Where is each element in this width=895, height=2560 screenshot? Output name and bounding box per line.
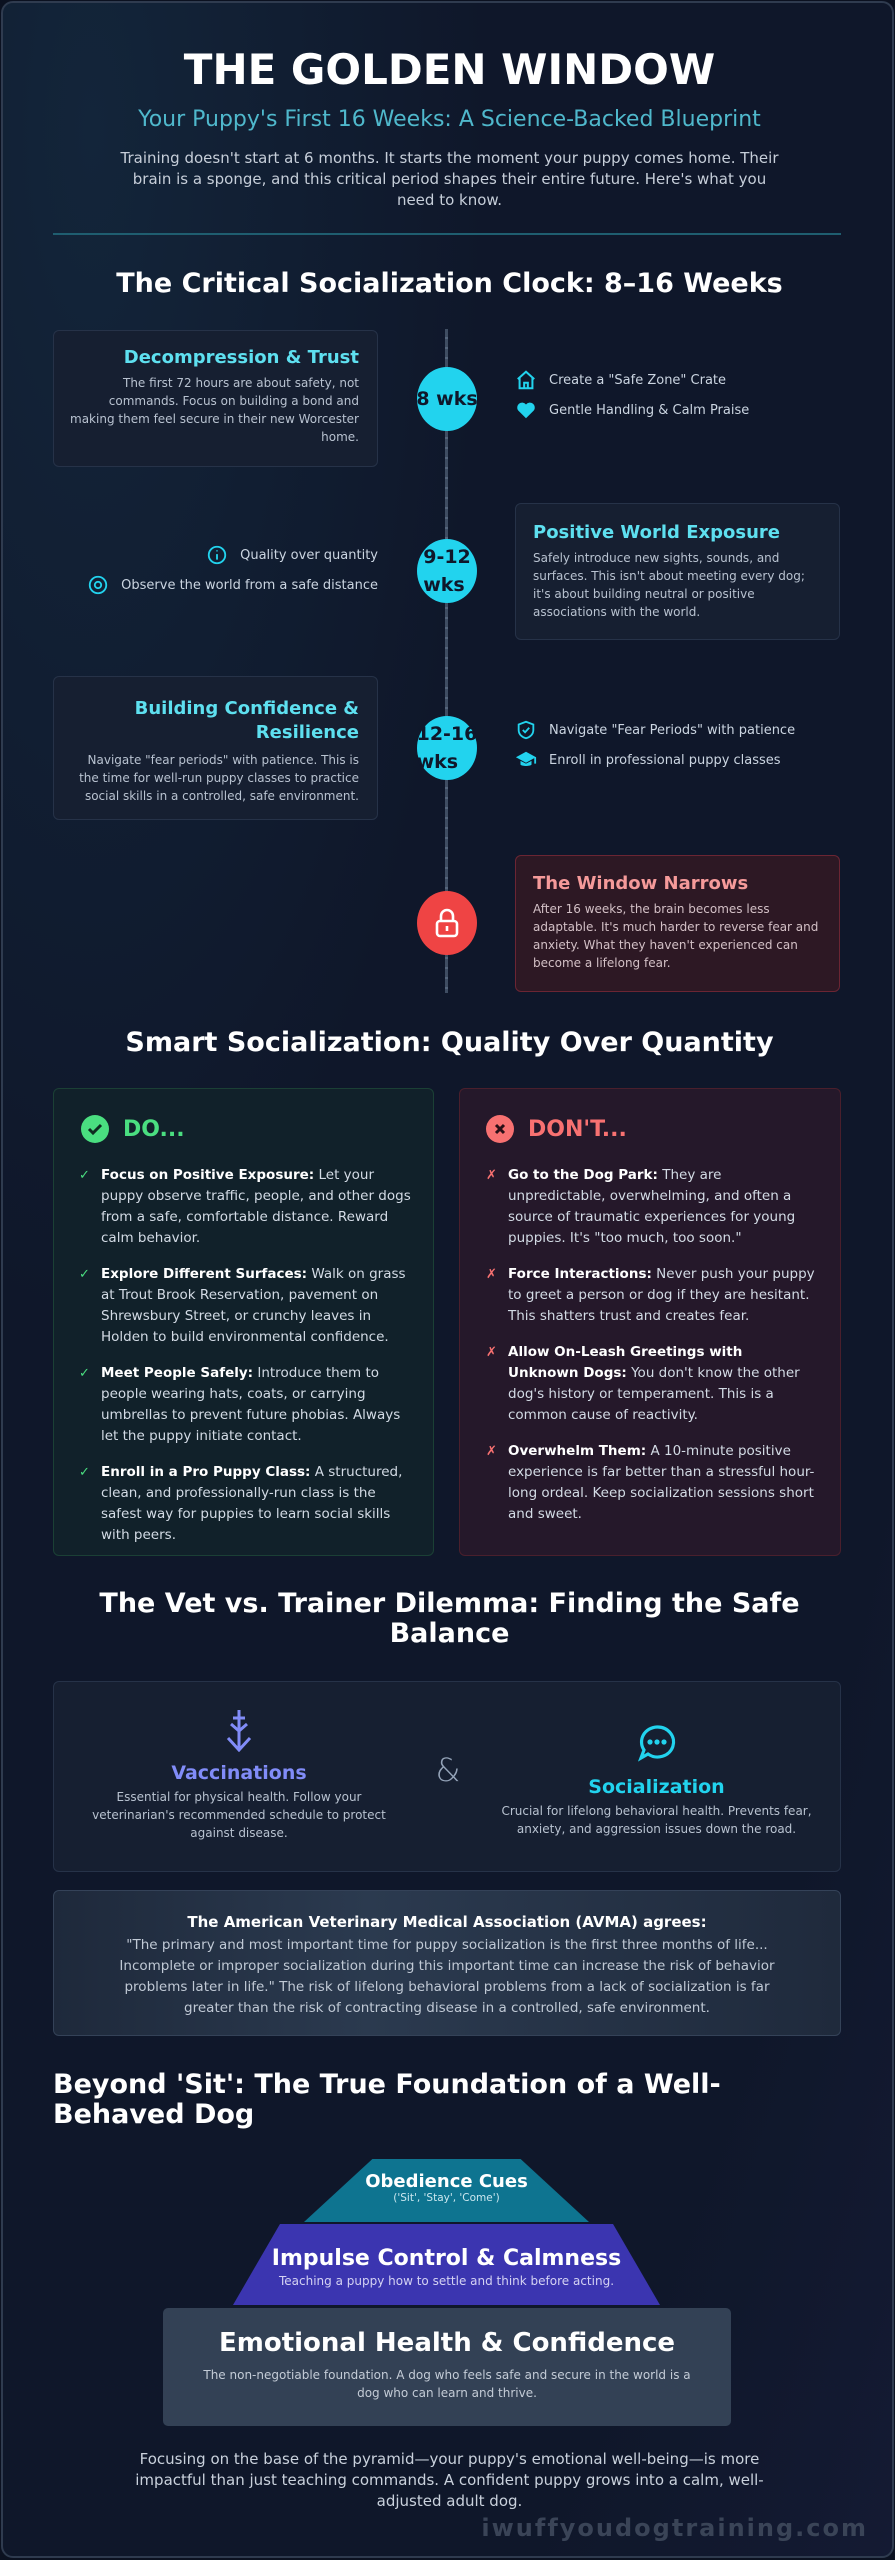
card: positive world exposure: [515, 503, 840, 640]
panel: do: [53, 1088, 434, 1556]
tier: emotional health: Emotional Health & Confidence: [219, 2328, 675, 2358]
subtitle: Your Puppy's First 16 Weeks: A Science-Backed Blueprint: [138, 107, 761, 132]
card: window narrows: [515, 855, 840, 992]
card: decompression: [53, 330, 378, 467]
circle: 12-16 wks: 12-16: [417, 723, 477, 745]
panel: don't: [459, 1088, 841, 1556]
panel: vaccinations & socialization: [53, 1681, 841, 1872]
panel: don't: ✗: [486, 1444, 497, 1459]
vaccinations: Essential for physical health. Follow your veterinarian's recommended schedule to protect against disease.: [92, 1790, 386, 1840]
icon: lock: [417, 891, 477, 955]
items: 9-12 wks: Quality over quantity: [240, 548, 378, 562]
dont heading: [486, 1115, 627, 1143]
panel: do: Enroll in a Pro Puppy Class: A structured, clean, and professionally-run class is the safest way for puppies to learn social skills with peers.: [101, 1464, 402, 1543]
intro text: Training doesn't start at 6 months. It starts the moment your puppy comes home. Their brain is a sponge, and this critical period shapes their entire future. Here's what you need to know.: [120, 149, 778, 209]
pyramid: [163, 2159, 731, 2426]
panel: don't: Force Interactions: Never push your puppy to greet a person or dog if they are hesitant. This shatters trust and creates fear.: [508, 1266, 815, 1324]
timeline: [53, 329, 840, 993]
do heading: DO...: [123, 1116, 185, 1142]
panel: don't: ✗: [486, 1345, 497, 1360]
card: positive world exposure: Safely introduce new sights, sounds, and surfaces. This isn't about meeting every dog; it's about building neutral or positive associations with the world.: [533, 551, 805, 619]
items: 12-16 wks: Navigate "Fear Periods" with patience: [549, 722, 795, 738]
card: building confidence: Building Confidence &: [135, 698, 359, 719]
callout: AVMA quote: [53, 1890, 841, 2036]
items: 8 wks: [517, 370, 749, 418]
circle: 9-12 wks: [417, 539, 477, 603]
socialization: Socialization: [588, 1776, 725, 1798]
panel: do: Focus on Positive Exposure: Let your puppy observe traffic, people, and other dogs from a safe, comfortable distance. Reward calm behavior.: [101, 1167, 411, 1246]
heading: smart socialization: Smart Socialization: Quality Over Quantity: [125, 1027, 774, 1058]
panel: do: Explore Different Surfaces: Walk on grass at Trout Brook Reservation, pavement on Shrewsbury Street, or crunchy leaves in Holden to build environmental confidence.: [101, 1266, 406, 1345]
heading: beyond sit: Behaved Dog: [53, 2099, 254, 2130]
items: 12-16 wks: Enroll in professional puppy classes: [549, 752, 781, 768]
heading: beyond sit: [53, 2069, 721, 2130]
panel: don't: Overwhelm Them: A 10-minute positive experience is far better than a stressful hour-long ordeal. Keep socialization sessions short and sweet.: [508, 1443, 814, 1522]
items: 9-12 wks: Observe the world from a safe distance: [121, 578, 378, 592]
ampersand: &: [436, 1751, 460, 1789]
items: 12-16 wks: [516, 720, 795, 768]
circle: 12-16 wks: wks: [417, 751, 458, 773]
panel: don't: Go to the Dog Park: They are unpredictable, overwhelming, and often a source of traumatic experiences for young puppies. It's "too much, too soon.": [508, 1167, 795, 1246]
card: decompression: Decompression & Trust: [124, 347, 359, 368]
callout: AVMA quote: "The primary and most important time for puppy socialization is the first three months of life... Incomplete or improper socialization during this important time can increase the risk of behavior problems later in life." The risk of lifelong behavioral problems from a lack of socialization is far greater than the risk of contracting disease in a controlled, safe environment.: [119, 1937, 775, 2016]
callout: AVMA quote: The American Veterinary Medical Association (AVMA) agrees:: [187, 1913, 707, 1931]
dont heading: DON'T...: [528, 1116, 627, 1142]
socialization: [501, 1725, 812, 1836]
panel: don't: Allow On-Leash Greetings with Unknown Dogs: You don't know the other dog's history or temperament. This is a common cause of reactivity.: [508, 1344, 800, 1423]
watermark: iwuffyoudogtraining.com: [481, 2514, 868, 2542]
card: building confidence: [53, 676, 378, 820]
panel: do: ✓: [79, 1465, 90, 1480]
heading: socialization clock: The Critical Socialization Clock: 8–16 Weeks: [116, 268, 783, 299]
items: 8 wks: Create a "Safe Zone" Crate: [549, 372, 726, 388]
vaccinations: [92, 1710, 386, 1840]
tier: impulse control: [233, 2224, 660, 2305]
circle: 9-12 wks: 9-12: [423, 546, 471, 568]
do heading: [81, 1115, 185, 1143]
panel: do: Meet People Safely: Introduce them to people wearing hats, coats, or carrying umbrellas to prevent future phobias. Always let the puppy initiate contact.: [101, 1365, 400, 1444]
panel: don't: ✗: [486, 1267, 497, 1282]
title: THE GOLDEN WINDOW: [184, 45, 715, 94]
socialization: Crucial for lifelong behavioral health. Prevents fear, anxiety, and aggression issues down the road.: [501, 1804, 812, 1836]
panel: do: ✓: [79, 1168, 90, 1183]
items: 9-12 wks: [88, 546, 378, 594]
closing text: Focusing on the base of the pyramid—your puppy's emotional well-being—is more impactful than just teaching commands. A confident puppy grows into a calm, well-adjusted adult dog.: [135, 2450, 764, 2510]
tier: emotional health: [163, 2308, 731, 2426]
tier: obedience: Obedience Cues: [365, 2171, 528, 2192]
card: window narrows: The Window Narrows: [533, 873, 748, 894]
card: window narrows: After 16 weeks, the brain becomes less adaptable. It's much harder to reverse fear and anxiety. What they haven't experienced can become a lifelong fear.: [533, 902, 818, 970]
circle: 12-16 wks: [417, 716, 477, 780]
circle: 9-12 wks: wks: [423, 574, 465, 596]
tier: impulse control: Teaching a puppy how to settle and think before acting.: [279, 2274, 614, 2288]
heading: beyond sit: Beyond 'Sit': The True Foundation of a Well-: [53, 2069, 721, 2100]
circle: 8 wks: [417, 367, 477, 431]
circle: 8 wks: 8 wks: [416, 388, 478, 410]
tier: obedience: ('Sit', 'Stay', 'Come'): [393, 2192, 500, 2204]
tier: obedience: [304, 2159, 589, 2222]
card: decompression: The first 72 hours are about safety, not commands. Focus on building a bond and making them feel secure in their new Worcester home.: [70, 376, 359, 444]
tier: impulse control: Impulse Control & Calmness: [272, 2246, 621, 2271]
heading: vet vs trainer: The Vet vs. Trainer Dilemma: Finding the Safe Balance: [99, 1588, 800, 1649]
panel: don't: ✗: [486, 1168, 497, 1183]
panel: do: ✓: [79, 1366, 90, 1381]
vaccinations: Vaccinations: [171, 1762, 307, 1784]
card: building confidence: Resilience: [256, 722, 359, 743]
card: building confidence: Navigate "fear periods" with patience. This is the time for well-run puppy classes to practice social skills in a controlled, safe environment.: [79, 753, 359, 803]
card: positive world exposure: Positive World Exposure: [533, 522, 780, 543]
items: 8 wks: Gentle Handling & Calm Praise: [549, 402, 749, 418]
tier: emotional health: The non-negotiable foundation. A dog who feels safe and secure in the world is a dog who can learn and thrive.: [203, 2368, 691, 2400]
panel: do: ✓: [79, 1267, 90, 1282]
